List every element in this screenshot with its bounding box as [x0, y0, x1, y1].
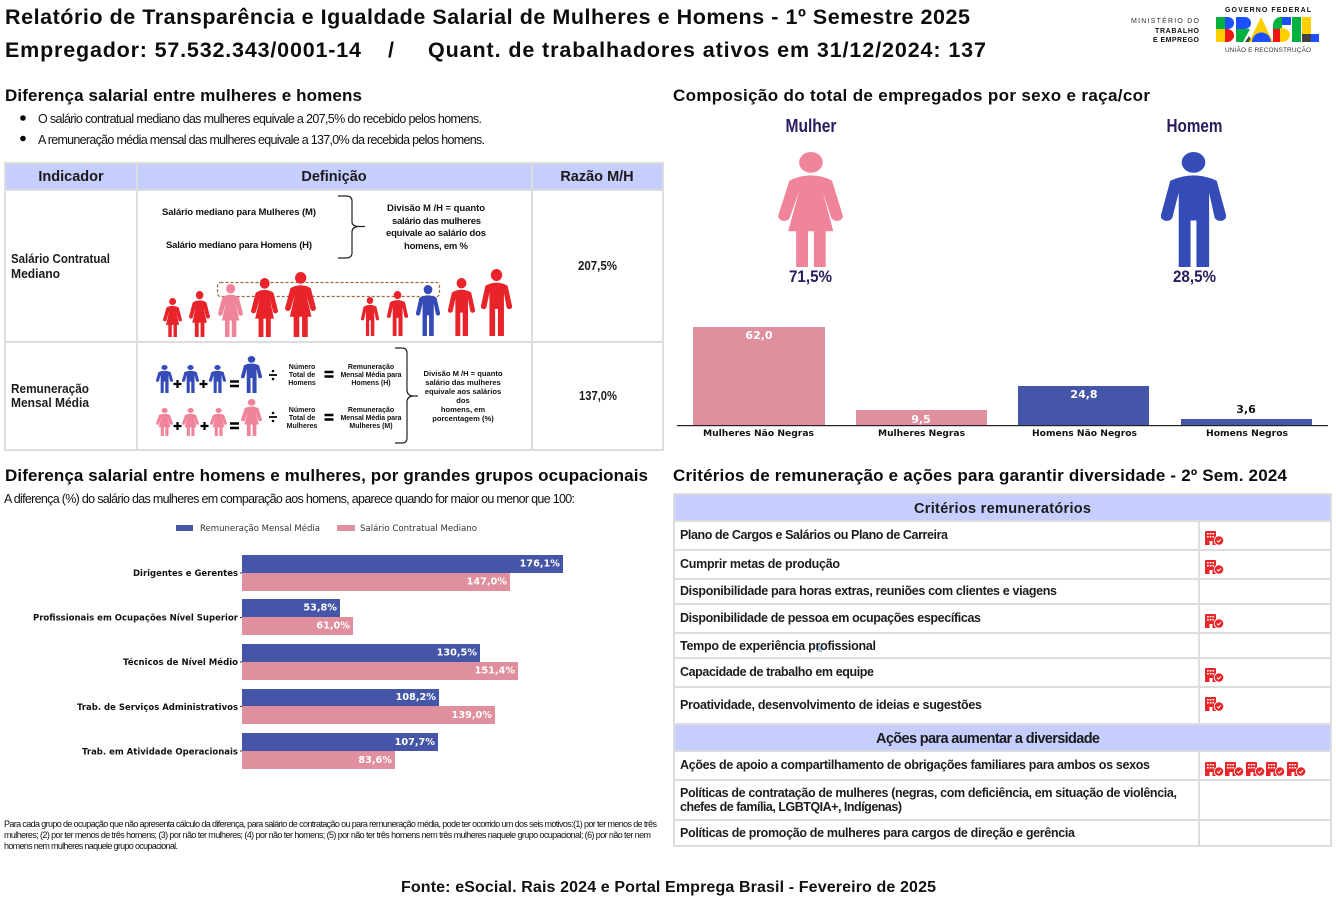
woman share [778, 116, 843, 286]
table: critérios e ações: chefes de família, LGBTQIA+, Indígenas) [680, 800, 902, 814]
table: critérios e ações: Tempo de experiência profissional [680, 639, 876, 653]
bar chart: sexo e raça/cor: Mulheres Negras [878, 429, 965, 439]
logo: ministério e governo federal: MINISTÉRIO DO [1131, 16, 1200, 25]
table: critérios e ações: Disponibilidade de pessoa em ocupações específicas [680, 611, 981, 625]
table: indicadores: 207,5% [578, 259, 617, 273]
definition: remuneração média: Mensal Média para [340, 372, 402, 379]
bar chart: grupos ocupacionais: Técnicos de Nível Médio [123, 657, 238, 668]
definition: salário mediano: Salário mediano para Homens (H) [166, 240, 312, 251]
definition: salário mediano: equivale ao salário dos [386, 228, 486, 239]
bar chart: grupos ocupacionais: 53,8% [303, 602, 337, 614]
man share [1161, 116, 1226, 286]
legend: Remuneração Mensal Média [200, 523, 320, 534]
table: critérios e ações: Políticas de promoção de mulheres para cargos de direção e gerência [680, 826, 1076, 840]
logo: ministério e governo federal: GOVERNO FEDERAL [1225, 7, 1312, 14]
table: indicadores: Remuneração [11, 382, 89, 396]
legend [176, 523, 477, 534]
bar chart: sexo e raça/cor: 24,8 [1070, 388, 1098, 401]
definition: remuneração média: homens, em [441, 405, 485, 414]
report title [5, 5, 986, 62]
logo: ministério e governo federal: UNIÃO E RECONSTRUÇÃO [1225, 45, 1311, 54]
table: indicadores: Indicador [38, 169, 104, 185]
logo: ministério e governo federal [1131, 7, 1319, 54]
table: critérios e ações: Ações de apoio a compartilhamento de obrigações familiares para ambos os sexos [680, 758, 1150, 772]
footnote [4, 819, 657, 851]
heading: critérios: Critérios de remuneração e ações para garantir diversidade - 2º Sem. 2024 [673, 466, 1288, 485]
report title: Quant. de trabalhadores ativos em 31/12/2024: 137 [428, 38, 986, 62]
heading: grupos ocupacionais: Diferença salarial entre homens e mulheres, por grandes grupos ocupacionais [5, 466, 648, 485]
bar chart: grupos ocupacionais: 147,0% [467, 576, 507, 588]
definition: salário mediano [162, 196, 486, 258]
definition: remuneração média: equivale aos salários [425, 387, 501, 396]
bar chart: sexo e raça/cor: Homens Negros [1206, 429, 1288, 439]
bar chart: grupos ocupacionais: 130,5% [437, 648, 477, 658]
bar chart: grupos ocupacionais: 61,0% [316, 620, 350, 632]
table: critérios e ações [673, 493, 1332, 847]
bar chart: sexo e raça/cor: 9,5 [911, 413, 931, 426]
bar chart: grupos ocupacionais: 108,2% [396, 692, 436, 703]
bar chart: grupos ocupacionais: Profissionais em Ocupações Nível Superior [33, 614, 239, 624]
table: indicadores: 137,0% [579, 389, 617, 403]
definition: salário mediano: homens, em % [404, 241, 469, 252]
footnote: Para cada grupo de ocupação que não apresenta cálculo da diferença, para salário de contratação ou para remuneração média, pode ter ocorrido um dos seis motivos:(1) por ter menos de três [4, 819, 657, 829]
man share: Homem [1166, 116, 1222, 136]
bar chart: grupos ocupacionais: Dirigentes e Gerentes [133, 569, 238, 579]
definition: remuneração média [156, 348, 503, 443]
bar chart: grupos ocupacionais: 83,6% [358, 755, 392, 766]
bar chart: grupos ocupacionais: 176,1% [520, 558, 560, 570]
bar chart: sexo e raça/cor: 3,6 [1236, 403, 1256, 416]
definition: remuneração média: Mulheres (M) [349, 423, 393, 430]
definition: salário mediano: salário das mulheres [392, 216, 481, 227]
heading: diferença salarial: Diferença salarial entre mulheres e homens [5, 86, 362, 105]
subtitle: grupos ocupacionais: A diferença (%) do salário das mulheres em comparação aos homens, aparece quando for maior ou menor que 100: [4, 492, 575, 506]
bar chart: grupos ocupacionais: 107,7% [395, 737, 435, 748]
man share: 28,5% [1173, 267, 1216, 286]
bar chart: grupos ocupacionais: 151,4% [475, 666, 515, 676]
report title: Relatório de Transparência e Igualdade Salarial de Mulheres e Homens - 1º Semestre 2025 [5, 5, 970, 29]
bar chart: sexo e raça/cor [677, 327, 1328, 439]
definition: remuneração média: Mulheres [287, 423, 317, 430]
table: indicadores: Salário Contratual [11, 252, 110, 266]
definition: remuneração média: Total de [289, 372, 315, 379]
definition: remuneração média: Número [289, 364, 315, 371]
table: indicadores: Mensal Média [11, 396, 90, 410]
bar chart: grupos ocupacionais: Trab. em Atividade Operacionais [82, 748, 238, 758]
bar chart: sexo e raça/cor: Homens Não Negros [1032, 429, 1137, 439]
icons: empresas com critério [1205, 531, 1306, 777]
table: critérios e ações: Plano de Cargos e Salários ou Plano de Carreira [680, 528, 949, 542]
logo: ministério e governo federal: TRABALHO [1155, 28, 1200, 35]
table: critérios e ações: Cumprir metas de produção [680, 557, 840, 571]
bar chart: sexo e raça/cor: 62,0 [745, 329, 773, 342]
heading: composição: Composição do total de empregados por sexo e raça/cor [673, 86, 1150, 105]
bar chart: grupos ocupacionais [33, 555, 563, 769]
definition: remuneração média: Total de [289, 415, 315, 422]
report title: Empregador: 57.532.343/0001-14 [5, 38, 361, 62]
bullet list: resumo: O salário contratual mediano das mulheres equivale a 207,5% do recebido pelos homens. [38, 112, 482, 126]
table: critérios e ações: Critérios remuneratórios [914, 501, 1091, 517]
pictogram: mulheres e homens em ordem salarial [163, 269, 512, 337]
definition: remuneração média: salário das mulheres [425, 378, 501, 387]
definition: remuneração média: Remuneração [348, 364, 394, 371]
table: critérios e ações: Políticas de contratação de mulheres (negras, com deficiência, em situação de violência, [680, 786, 1177, 800]
definition: salário mediano: Salário mediano para Mulheres (M) [162, 207, 316, 218]
bullet list: resumo [20, 112, 485, 147]
definition: remuneração média: Número [289, 407, 315, 414]
source: Fonte: eSocial. Rais 2024 e Portal Emprega Brasil - Fevereiro de 2025 [401, 879, 936, 896]
woman share: 71,5% [789, 267, 832, 286]
bar chart: grupos ocupacionais: Trab. de Serviços Administrativos [77, 703, 238, 713]
definition: remuneração média: Divisão M /H = quanto [424, 369, 503, 378]
table: critérios e ações: Proatividade, desenvolvimento de ideias e sugestões [680, 698, 982, 712]
definition: remuneração média: Homens [288, 380, 316, 387]
report title: / [388, 38, 394, 62]
bar chart: grupos ocupacionais: 139,0% [452, 710, 492, 721]
table: critérios e ações: Ações para aumentar a diversidade [876, 731, 1100, 747]
table: indicadores: Razão M/H [560, 169, 634, 185]
table: critérios e ações: Capacidade de trabalho em equipe [680, 665, 874, 679]
footnote: mulheres; (2) por ter menos de três homens; (3) por não ter mulheres; (4) por não ter homens; (5) por não ter três homens nem três mulheres naquele grupo ocupacional; (6) por não ter nem [4, 830, 651, 840]
definition: remuneração média: Remuneração [348, 407, 394, 414]
definition: remuneração média: dos [456, 396, 470, 405]
table: indicadores: Definição [301, 169, 367, 185]
bar chart: sexo e raça/cor: Mulheres Não Negras [703, 429, 814, 439]
table: critérios e ações: Disponibilidade para horas extras, reuniões com clientes e viagens [680, 584, 1057, 598]
definition: remuneração média: Homens (H) [351, 380, 391, 387]
table: indicadores: Mediano [11, 267, 60, 281]
footnote: homens nem mulheres naquele grupo ocupacional. [4, 841, 178, 851]
logo: ministério e governo federal: E EMPREGO [1153, 37, 1200, 44]
table: indicadores [4, 162, 664, 451]
bullet list: resumo: A remuneração média mensal das mulheres equivale a 137,0% da recebida pelos homens. [38, 133, 485, 147]
definition: remuneração média: Mensal Média para [340, 415, 402, 422]
woman share: Mulher [786, 116, 836, 136]
legend: Salário Contratual Mediano [360, 524, 477, 534]
definition: salário mediano: Divisão M /H = quanto [387, 203, 485, 214]
definition: remuneração média: porcentagem (%) [432, 414, 494, 423]
